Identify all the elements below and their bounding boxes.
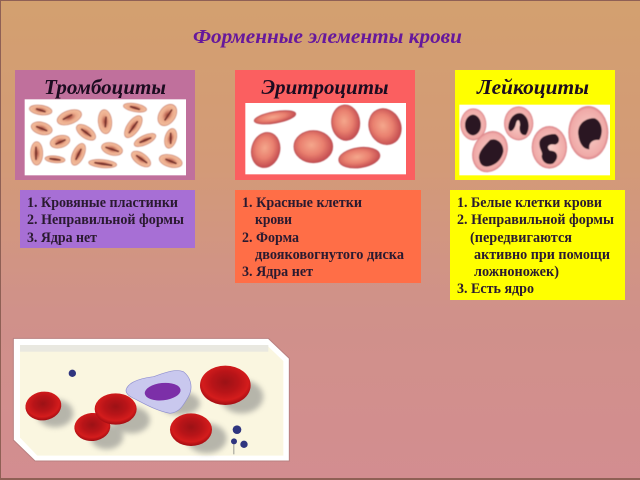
text block: leukocytes facts: (передвигаются — [470, 230, 572, 246]
heading: erythrocytes: Эритроциты — [262, 75, 388, 99]
image: red cells — [245, 103, 407, 174]
title: Форменные элементы крови — [193, 26, 462, 48]
heading: thrombocytes: Тромбоциты — [44, 75, 166, 99]
text block: erythrocytes facts: крови — [255, 212, 292, 228]
text block: thrombocytes facts: 1. Кровяные пластинки — [27, 195, 178, 211]
text block: leukocytes facts: активно при помощи — [474, 247, 610, 263]
image: platelets — [25, 99, 186, 175]
red blood cells — [24, 366, 251, 446]
text block: erythrocytes facts — [235, 190, 421, 283]
text block: leukocytes facts: ложноножек) — [474, 264, 559, 280]
image: white cells — [459, 105, 610, 178]
text block: erythrocytes facts: 2. Форма — [242, 230, 300, 246]
panel: leukocytes — [455, 70, 615, 180]
text block: thrombocytes facts — [20, 190, 195, 248]
text block: erythrocytes facts: двояковогнутого диска — [255, 247, 405, 263]
text block: erythrocytes facts: 1. Красные клетки — [242, 195, 362, 211]
text block: thrombocytes facts: 3. Ядра нет — [27, 230, 97, 246]
text block: leukocytes facts: 2. Неправильной формы — [457, 212, 614, 228]
panel: thrombocytes — [15, 70, 195, 180]
panel: erythrocytes — [235, 70, 415, 180]
illustration: blood cells — [13, 338, 289, 461]
text block: erythrocytes facts: 3. Ядра нет — [242, 264, 313, 280]
text block: leukocytes facts: 3. Есть ядро — [457, 281, 534, 297]
text block: leukocytes facts — [450, 190, 625, 300]
white blood cell — [126, 371, 191, 413]
text block: leukocytes facts: 1. Белые клетки крови — [457, 195, 602, 211]
platelets: blue dots — [69, 370, 248, 454]
heading: leukocytes: Лейкоциты — [476, 75, 589, 99]
text block: thrombocytes facts: 2. Неправильной формы — [27, 212, 184, 228]
